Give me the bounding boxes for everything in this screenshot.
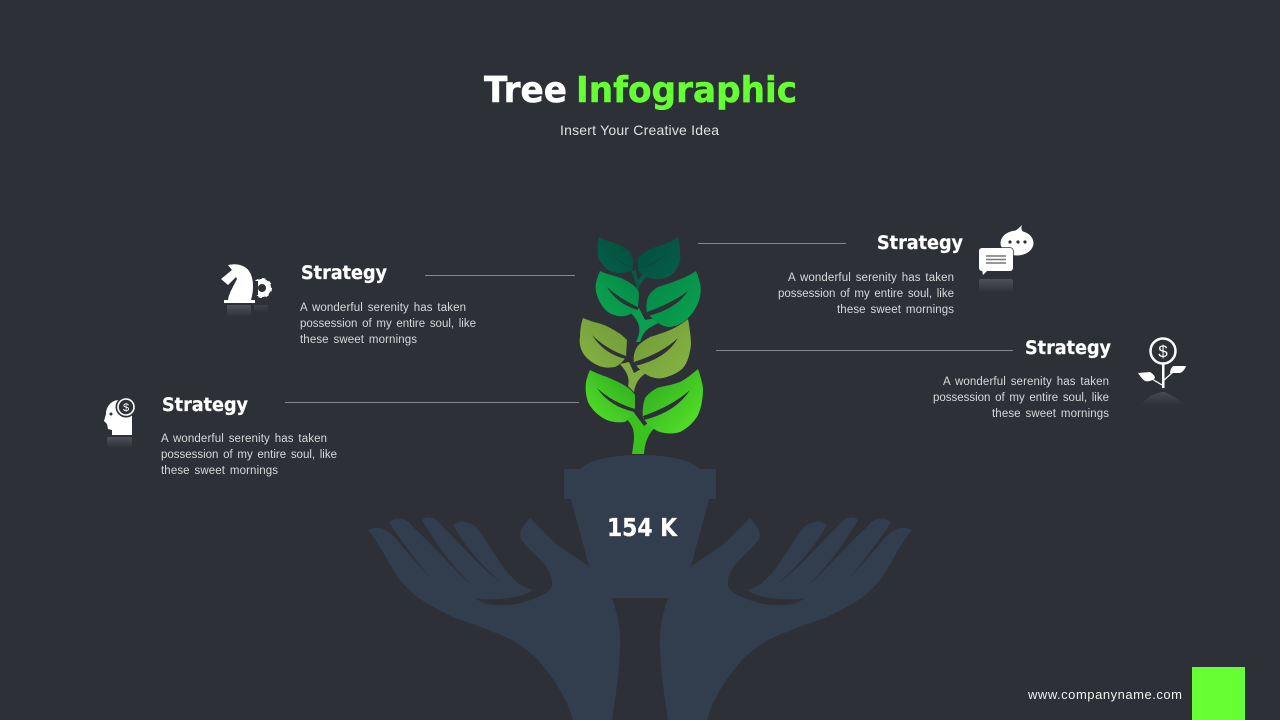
footer accent square bbox=[1192, 667, 1245, 720]
description: A wonderful serenity has taken bbox=[788, 272, 954, 284]
stem: middle bbox=[630, 308, 660, 342]
connector line bbox=[716, 350, 1013, 352]
description bbox=[933, 376, 1109, 420]
subtitle: Insert Your Creative Idea bbox=[560, 122, 719, 138]
description bbox=[161, 433, 337, 477]
callout: strategy upper left bbox=[300, 262, 575, 346]
stem: top bbox=[630, 270, 648, 292]
plant bbox=[580, 237, 703, 454]
description: A wonderful serenity has taken bbox=[161, 433, 327, 445]
stem: bottom bbox=[622, 410, 660, 454]
callout: strategy upper right bbox=[698, 232, 964, 316]
description: these sweet mornings bbox=[992, 408, 1109, 420]
icon: chat bubbles bbox=[979, 225, 1034, 292]
right hand bbox=[660, 517, 912, 720]
footer website: www.companyname.com bbox=[1027, 687, 1182, 702]
stem: lower middle bbox=[620, 362, 654, 392]
description bbox=[778, 272, 954, 316]
pot value: 154 K bbox=[607, 513, 678, 542]
description: these sweet mornings bbox=[837, 304, 954, 316]
pot bbox=[564, 455, 716, 598]
leaf tier 3 bbox=[580, 318, 691, 378]
description: A wonderful serenity has taken bbox=[943, 376, 1109, 388]
heading: Strategy bbox=[877, 232, 964, 254]
title: Infographic bbox=[576, 70, 797, 111]
heading: Strategy bbox=[1025, 337, 1112, 359]
heading: Strategy bbox=[162, 394, 249, 416]
description bbox=[300, 302, 476, 346]
heading: Strategy bbox=[301, 262, 388, 284]
leaf tier 1 bbox=[598, 237, 680, 279]
icon: chess knight and gear bbox=[221, 264, 271, 317]
description: possession of my entire soul, like bbox=[161, 449, 337, 461]
description: A wonderful serenity has taken bbox=[300, 302, 466, 314]
left hand bbox=[368, 517, 620, 720]
description: possession of my entire soul, like bbox=[300, 318, 476, 330]
icon: money plant bbox=[1138, 338, 1186, 405]
description: possession of my entire soul, like bbox=[778, 288, 954, 300]
callout: strategy middle right bbox=[716, 337, 1112, 420]
description: possession of my entire soul, like bbox=[933, 392, 1109, 404]
title: Tree bbox=[484, 70, 567, 111]
leaf tier 4 bbox=[586, 369, 703, 434]
connector line bbox=[698, 242, 846, 244]
description: these sweet mornings bbox=[161, 465, 278, 477]
connector line bbox=[285, 402, 579, 404]
icon: head with coin bbox=[104, 396, 136, 448]
leaf tier 2 bbox=[596, 271, 701, 327]
title bbox=[484, 70, 797, 111]
icon: head with coin: $ bbox=[123, 402, 129, 414]
callout: strategy lower left bbox=[161, 394, 579, 477]
connector line bbox=[425, 274, 575, 276]
description: these sweet mornings bbox=[300, 334, 417, 346]
icon: money plant: $ bbox=[1158, 342, 1168, 361]
